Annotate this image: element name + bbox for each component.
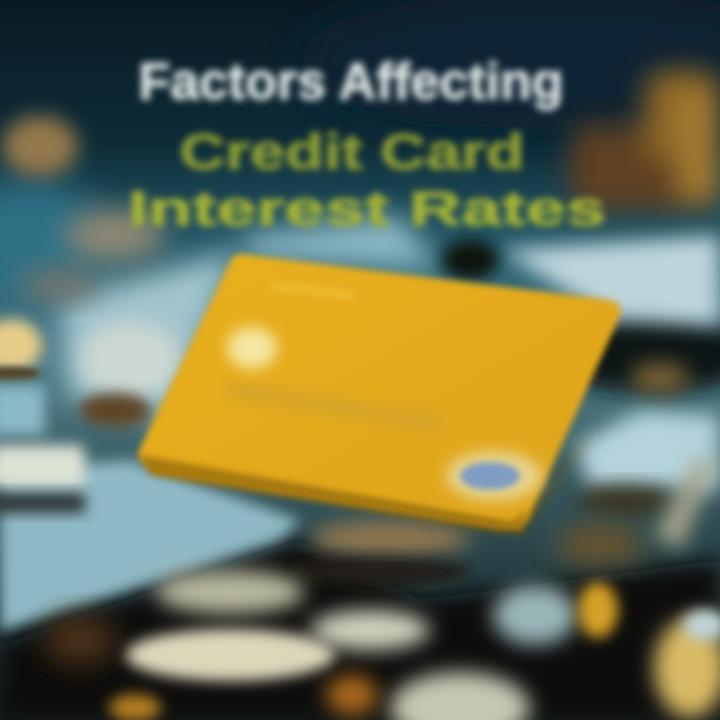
card logo — [446, 451, 542, 501]
card faint label — [270, 280, 355, 300]
card body — [138, 254, 621, 526]
title — [128, 53, 606, 236]
card shadow edge — [135, 420, 600, 532]
card bottom edge — [140, 455, 528, 530]
card chip — [227, 327, 277, 369]
coin stack top right — [570, 70, 720, 210]
title line 3: Interest Rates — [128, 183, 606, 236]
credit card — [135, 254, 621, 532]
coin stacks bottom and right — [44, 362, 720, 720]
coin stacks left — [0, 209, 180, 513]
title line 1: Factors Affecting — [138, 53, 564, 111]
icon: distant coin — [2, 116, 78, 176]
title line 2: Credit Card — [180, 124, 524, 180]
card number strip — [225, 382, 445, 432]
